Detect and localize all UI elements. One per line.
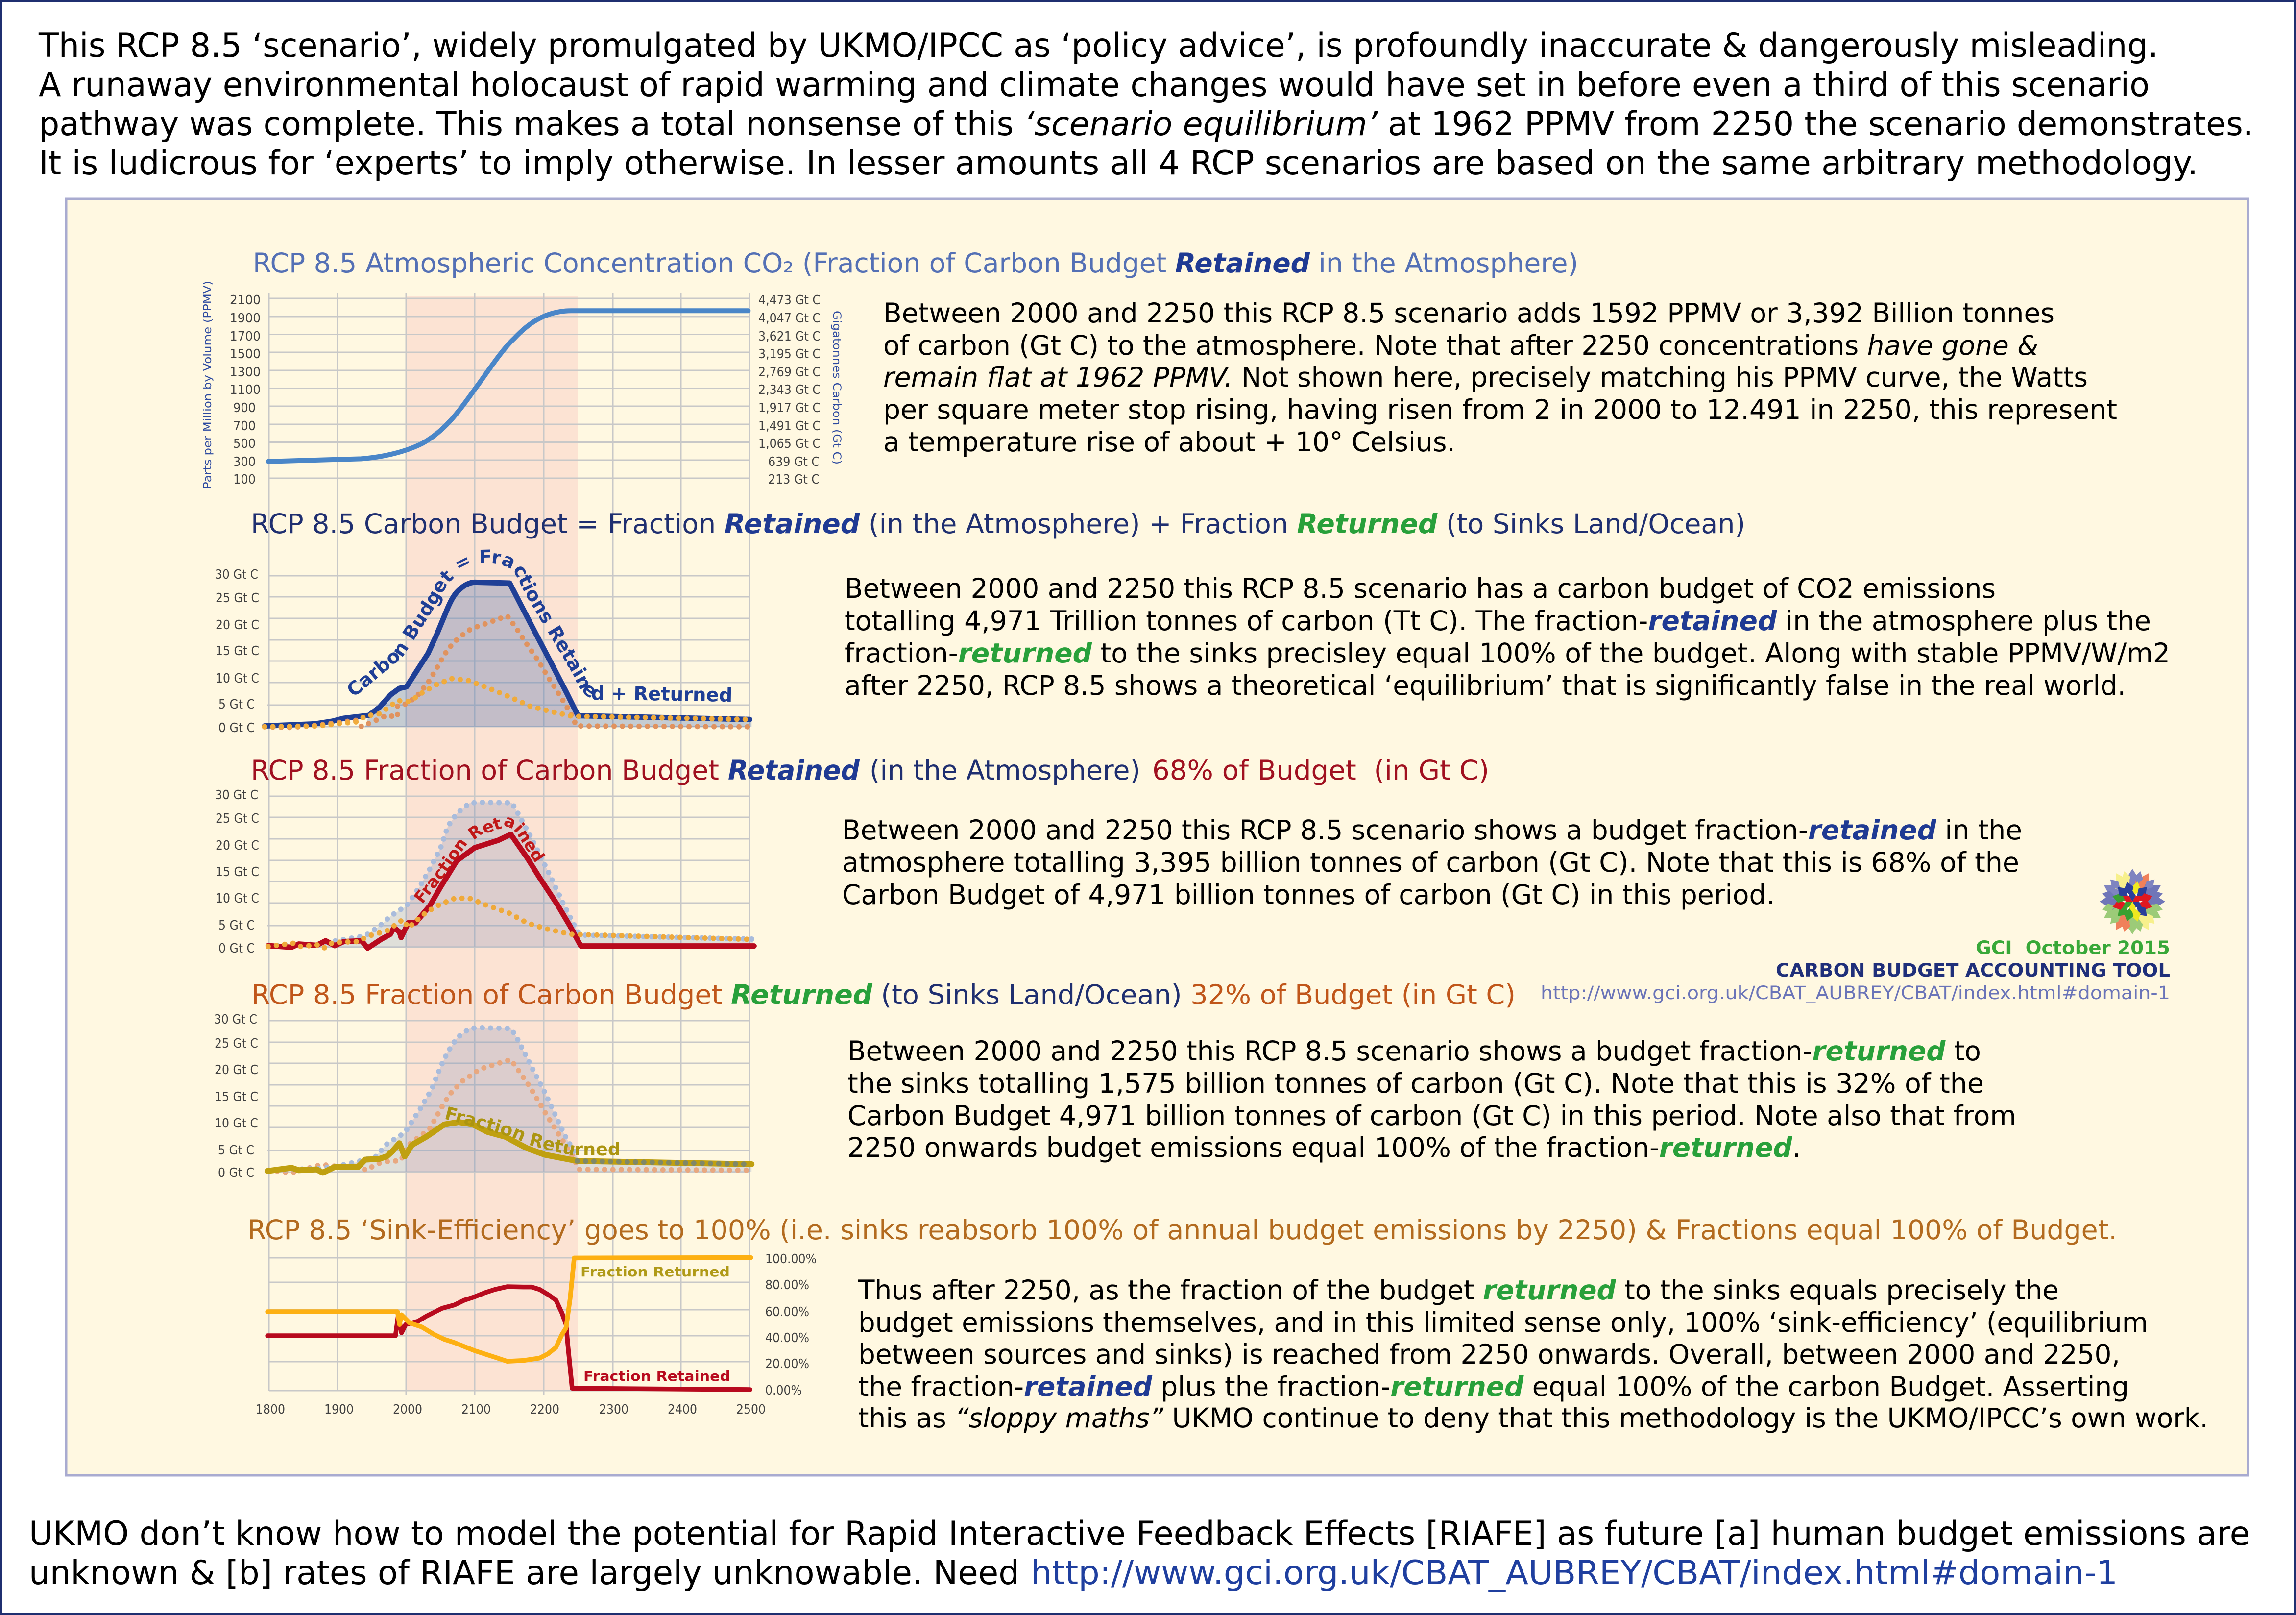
chart 4 axis labels: 0 Gt C — [218, 1166, 254, 1180]
footer text block: unknown & [b] rates of RIAFE are largely unknowable. Need — [29, 1554, 1019, 1592]
chart 3 title: Retained — [728, 755, 860, 786]
chart 3 description — [842, 814, 2022, 910]
left axis labels: 1100 — [230, 383, 261, 397]
chart 1 description: of carbon (Gt C) to the atmosphere. Note that after 2250 concentrations have gone & — [883, 330, 2038, 361]
chart 3 description: atmosphere totalling 3,395 billion tonnes of carbon (Gt C). Note that this is 68% of the — [842, 847, 2019, 878]
left axis labels: 1300 — [230, 365, 261, 380]
chart 2 axis labels — [215, 567, 259, 735]
right axis labels: 4,047 Gt C — [758, 311, 821, 326]
right axis labels: 2,769 Gt C — [758, 365, 821, 380]
chart 3 curves — [268, 802, 754, 948]
right axis labels: 3,621 Gt C — [758, 329, 821, 344]
chart 5 description: between sources and sinks) is reached from 2250 onwards. Overall, between 2000 and 2250, — [858, 1339, 2120, 1370]
chart 2 description: fraction-returned to the sinks precisley equal 100% of the budget. Along with stable PPMV/W/m2 — [845, 637, 2170, 669]
chart 3 title: 68% of Budget (in Gt C) — [1152, 755, 1489, 786]
footer text block: http://www.gci.org.uk/CBAT_AUBREY/CBAT/index.html#domain-1 — [1031, 1554, 2118, 1592]
chart 5 description: the fraction-retained plus the fraction-returned equal 100% of the carbon Budget. Asserting — [858, 1371, 2129, 1402]
chart 2 axis labels: 0 Gt C — [218, 721, 255, 735]
shaded period band 2000 to 2250 — [406, 296, 578, 1391]
heading text block: pathway was complete. This makes a total nonsense of this ‘scenario equilibrium’ at 1962 PPMV from 2250 the scenario demonstrates. — [39, 105, 2253, 144]
left axis labels: 100 — [233, 472, 256, 487]
chart 5 description: this as “sloppy maths” UKMO continue to deny that this methodology is the UKMO/IPCC’s own work. — [858, 1402, 2208, 1434]
chart 2 description — [845, 573, 2170, 701]
left axis labels: 1900 — [230, 311, 261, 326]
chart 4 description — [847, 1035, 2016, 1163]
left axis labels: 700 — [233, 419, 256, 434]
main panel background — [66, 199, 2248, 1475]
left axis labels: 500 — [233, 437, 256, 451]
chart 3 axis labels: 30 Gt C — [215, 788, 258, 803]
right axis labels: 639 Gt C — [768, 455, 820, 469]
chart 5 line label retained: Fraction Retained — [583, 1368, 730, 1384]
chart 5 year axis labels — [256, 1402, 766, 1417]
right axis labels — [758, 293, 821, 487]
heading text block: This RCP 8.5 ‘scenario’, widely promulgated by UKMO/IPCC as ‘policy advice’, is profoundly inaccurate & dangerously misleading. — [38, 26, 2158, 65]
panel: chart 2 carbon budget — [215, 550, 752, 735]
chart 5 curves — [267, 1258, 751, 1390]
chart 2 axis labels: 5 Gt C — [218, 697, 255, 712]
panel: chart 3 fraction retained — [215, 788, 757, 956]
chart 3 curved label: Fraction Retained — [413, 817, 546, 904]
chart 5 year axis labels: 1900 — [324, 1402, 354, 1417]
GCI credit text — [1541, 937, 2170, 1003]
chart 4 curved label: Fraction Returned — [445, 1106, 619, 1155]
chart 3 axis labels: 15 Gt C — [216, 865, 259, 880]
chart 4 axis labels: 10 Gt C — [215, 1116, 258, 1131]
chart 4 axis labels — [214, 1012, 258, 1180]
chart 3 axis labels: 25 Gt C — [216, 811, 259, 826]
chart 1 description: per square meter stop rising, having risen from 2 in 2000 to 12.491 in 2250, this represent — [883, 394, 2117, 425]
heading text block — [38, 26, 2253, 183]
heading text block: A runaway environmental holocaust of rapid warming and climate changes would have set in before even a third of this scenario — [39, 66, 2150, 104]
chart 5 percent axis labels: 100.00% — [765, 1252, 817, 1267]
chart 5 line label returned: Fraction Returned — [580, 1264, 730, 1280]
chart 5 description: budget emissions themselves, and in this limited sense only, 100% ‘sink-efficiency’ (equilibrium — [858, 1307, 2148, 1338]
CO2 concentration curve — [268, 311, 748, 462]
chart 2 curves — [265, 582, 751, 728]
chart 2 axis labels: 25 Gt C — [216, 591, 259, 606]
chart 3 axis labels: 0 Gt C — [218, 941, 255, 956]
chart 5 percent axis labels: 40.00% — [765, 1331, 809, 1346]
chart 3 title: (in the Atmosphere) — [870, 755, 1140, 786]
chart 3 description: Between 2000 and 2250 this RCP 8.5 scenario shows a budget fraction-retained in the — [842, 814, 2022, 846]
left axis labels: 1500 — [230, 347, 261, 362]
footer text block: UKMO don’t know how to model the potential for Rapid Interactive Feedback Effects [RIAFE] as future [a] human budget emissions are — [29, 1515, 2250, 1553]
chart 5 percent axis labels: 0.00% — [765, 1383, 802, 1398]
chart 5 year axis labels: 2300 — [599, 1402, 628, 1417]
chart 5 description — [858, 1274, 2208, 1434]
chart 2 axis labels: 30 Gt C — [215, 567, 258, 582]
right axis labels: 1,491 Gt C — [758, 419, 821, 434]
right axis labels: 213 Gt C — [768, 472, 820, 487]
chart 3 axis labels: 20 Gt C — [216, 838, 259, 853]
chart 2 axis labels: 15 Gt C — [216, 644, 259, 659]
heading text block: It is ludicrous for ‘experts’ to imply otherwise. In lesser amounts all 4 RCP scenarios are based on the same arbitrary methodology. — [39, 144, 2198, 183]
chart 4 title: RCP 8.5 Fraction of Carbon Budget Returned (to Sinks Land/Ocean) 32% of Budget (in Gt C) — [251, 979, 1516, 1010]
left axis labels — [230, 293, 261, 487]
panel: chart 1 atmospheric concentration — [202, 281, 843, 489]
chart 4 curves — [267, 1028, 751, 1173]
footer text block — [29, 1515, 2250, 1592]
chart 5 year axis labels: 1800 — [256, 1402, 285, 1417]
chart 1 description: remain flat at 1962 PPMV. Not shown here, precisely matching his PPMV curve, the Watts — [883, 362, 2088, 393]
chart 1 description: Between 2000 and 2250 this RCP 8.5 scenario adds 1592 PPMV or 3,392 Billion tonnes — [883, 297, 2054, 329]
chart 5 title: RCP 8.5 ‘Sink-Efficiency’ goes to 100% (i.e. sinks reabsorb 100% of annual budget emissions by 2250) & Fractions equal 100% of Budget. — [247, 1214, 2117, 1246]
chart 1 title: RCP 8.5 Atmospheric Concentration CO₂ (Fraction of Carbon Budget Retained in the Atmosphere) — [253, 247, 1578, 279]
chart 4 axis labels: 5 Gt C — [218, 1143, 254, 1158]
GCI credit text: CARBON BUDGET ACCOUNTING TOOL — [1776, 960, 2170, 981]
chart 2 axis labels: 20 Gt C — [216, 618, 259, 633]
chart 2 axis labels: 10 Gt C — [216, 671, 259, 686]
chart 2 title: RCP 8.5 Carbon Budget = Fraction Retained (in the Atmosphere) + Fraction Returned (to Sinks Land/Ocean) — [251, 508, 1745, 539]
chart 3 title — [251, 755, 1489, 786]
right axis labels: 3,195 Gt C — [758, 347, 821, 362]
chart 5 year axis labels: 2500 — [736, 1402, 766, 1417]
chart 4 description: Carbon Budget 4,971 billion tonnes of carbon (Gt C) in this period. Note also that from — [847, 1100, 2016, 1131]
chart 4 description: Between 2000 and 2250 this RCP 8.5 scenario shows a budget fraction-returned to — [847, 1035, 1981, 1067]
chart 1 description: a temperature rise of about + 10° Celsius. — [883, 426, 1455, 458]
right axis labels: 1,065 Gt C — [758, 437, 821, 451]
chart 2 description: totalling 4,971 Trillion tonnes of carbon (Tt C). The fraction-retained in the atmosphere plus the — [845, 605, 2151, 636]
chart 5 percent axis labels: 60.00% — [765, 1305, 809, 1320]
right axis title: Gigatonnes Carbon (Gt C) — [830, 311, 843, 465]
chart 5 year axis labels: 2100 — [461, 1402, 491, 1417]
icon: GCI logo — [2100, 869, 2165, 934]
chart 4 axis labels: 25 Gt C — [215, 1036, 258, 1051]
left axis labels: 1700 — [230, 329, 261, 344]
chart 4 description: the sinks totalling 1,575 billion tonnes of carbon (Gt C). Note that this is 32% of the — [847, 1068, 1984, 1099]
chart 5 percent axis labels — [765, 1252, 817, 1398]
GCI credit text: http://www.gci.org.uk/CBAT_AUBREY/CBAT/index.html#domain-1 — [1541, 982, 2170, 1003]
chart 4 axis labels: 30 Gt C — [214, 1012, 257, 1027]
right axis labels: 1,917 Gt C — [758, 401, 821, 416]
chart 2 description: Between 2000 and 2250 this RCP 8.5 scenario has a carbon budget of CO2 emissions — [845, 573, 1996, 604]
GCI credit text: GCI October 2015 — [1976, 937, 2170, 958]
chart 5 year axis labels: 2200 — [530, 1402, 559, 1417]
chart 1 description — [883, 297, 2117, 458]
right axis labels: 2,343 Gt C — [758, 383, 821, 397]
left axis labels: 900 — [233, 401, 256, 416]
chart 3 axis labels: 10 Gt C — [216, 891, 259, 906]
vertical grid lines — [269, 293, 749, 1395]
chart 5 description: Thus after 2250, as the fraction of the budget returned to the sinks equals precisely the — [858, 1274, 2059, 1306]
chart 4 description: 2250 onwards budget emissions equal 100% of the fraction-returned. — [847, 1132, 1801, 1163]
left axis labels: 2100 — [230, 293, 261, 308]
left axis labels: 300 — [233, 455, 256, 469]
panel: chart 5 sink efficiency — [256, 1252, 817, 1417]
chart 5 year axis labels: 2400 — [668, 1402, 697, 1417]
chart 5 percent axis labels: 20.00% — [765, 1357, 809, 1371]
chart 3 title: RCP 8.5 Fraction of Carbon Budget — [251, 755, 719, 786]
chart 3 axis labels: 5 Gt C — [218, 918, 255, 933]
chart 5 percent axis labels: 80.00% — [765, 1278, 809, 1293]
chart 3 axis labels — [215, 788, 259, 956]
chart 2 curved label: Carbon Budget = Fractions Retained + Returned — [348, 550, 731, 702]
panel: chart 4 fraction returned — [214, 1012, 754, 1180]
right axis labels: 4,473 Gt C — [758, 293, 821, 308]
chart 5 year axis labels: 2000 — [393, 1402, 422, 1417]
chart 4 axis labels: 20 Gt C — [215, 1063, 258, 1077]
chart 3 description: Carbon Budget of 4,971 billion tonnes of carbon (Gt C) in this period. — [842, 879, 1775, 910]
chart 2 description: after 2250, RCP 8.5 shows a theoretical ‘equilibrium’ that is significantly false in the real world. — [845, 670, 2126, 701]
chart 4 axis labels: 15 Gt C — [215, 1090, 258, 1104]
left axis title: Parts per Million by Volume (PPMV) — [202, 281, 214, 489]
